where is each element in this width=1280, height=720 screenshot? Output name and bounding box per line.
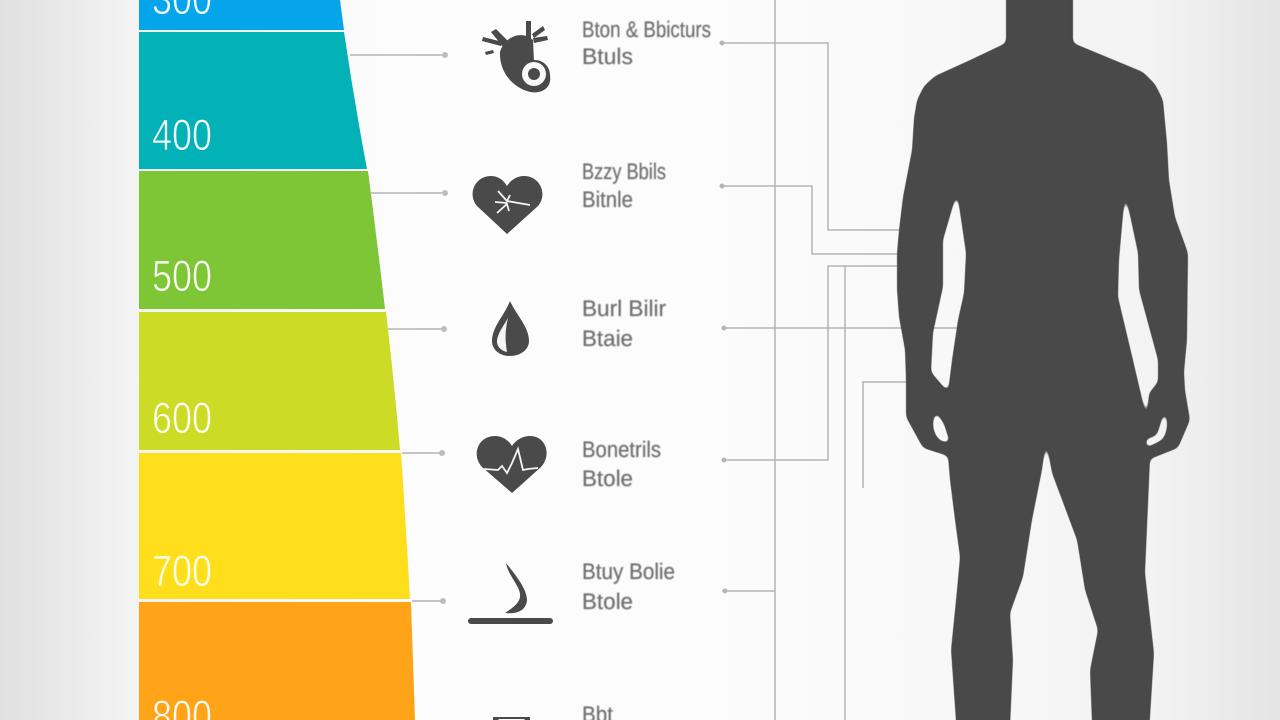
scale band 700 xyxy=(139,453,410,599)
scale band 800 xyxy=(139,602,415,720)
icon: blood drop xyxy=(492,301,529,356)
icon: bottom partial icon xyxy=(493,717,530,720)
label 5 xyxy=(582,559,675,614)
label 4 xyxy=(582,437,661,491)
human body silhouette xyxy=(897,0,1190,720)
label 1: Bton & Bbicturs xyxy=(582,17,711,42)
label 3: Btaie xyxy=(582,326,633,351)
label 1 xyxy=(582,17,711,69)
scale band 400: 400 xyxy=(152,111,212,160)
scale band 600: 600 xyxy=(152,394,212,443)
label 3 xyxy=(582,296,667,351)
connector lines: scale to icons xyxy=(350,52,448,604)
label 4: Bonetrils xyxy=(582,437,661,462)
label 2 xyxy=(582,159,666,212)
scale band 700: 700 xyxy=(152,547,212,596)
label 1: Btuls xyxy=(582,44,633,69)
scale band 600 xyxy=(139,312,400,450)
icon: cracked heart xyxy=(473,176,542,234)
scale band 500 xyxy=(139,171,385,309)
label 2: Bitnle xyxy=(582,187,633,212)
icon: heart with pulse xyxy=(477,436,547,493)
label 5: Btuy Bolie xyxy=(582,559,675,584)
label 2: Bzzy Bbils xyxy=(582,159,666,184)
icon: anatomical heart xyxy=(482,21,550,92)
scale band 500: 500 xyxy=(152,252,212,301)
scale band 400 xyxy=(139,32,367,169)
panel: colour scale xyxy=(139,0,415,720)
connector lines: labels to body xyxy=(720,0,960,720)
label 3: Burl Bilir xyxy=(582,296,667,321)
label 4: Btole xyxy=(582,466,633,491)
label 5: Btole xyxy=(582,589,633,614)
scale band 300 xyxy=(139,0,344,30)
icon: curve over base line xyxy=(468,563,553,624)
